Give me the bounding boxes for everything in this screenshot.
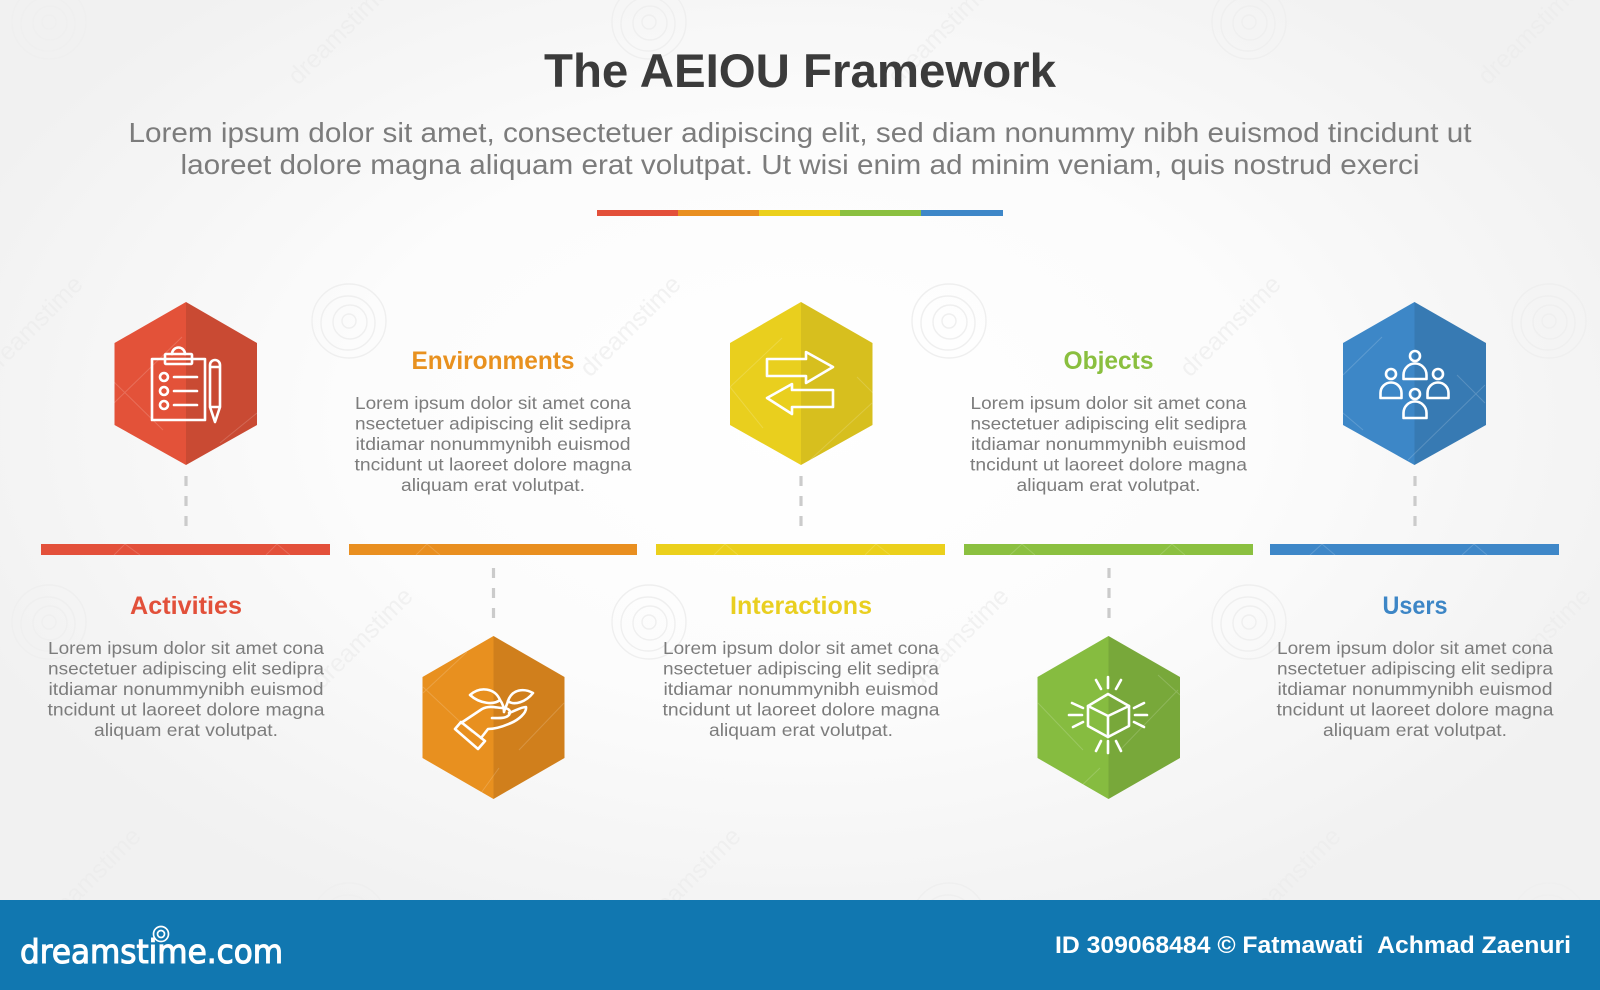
icon: hand holding plant bbox=[455, 689, 533, 749]
connector bbox=[799, 476, 803, 527]
icon: clipboard and pencil bbox=[152, 348, 220, 422]
panel: environments bbox=[349, 347, 637, 799]
users text: aliquam erat volutpat. bbox=[1323, 720, 1507, 740]
activities heading: Activities bbox=[130, 592, 242, 620]
environments text: tncidunt ut laoreet dolore magna bbox=[354, 454, 632, 474]
interactions bar bbox=[656, 544, 945, 555]
interactions heading: Interactions bbox=[730, 592, 872, 620]
interactions text: Lorem ipsum dolor sit amet cona bbox=[663, 638, 939, 658]
users bar bbox=[1270, 544, 1559, 555]
interactions hexagon bbox=[730, 302, 873, 465]
image id and credit: ID 309068484 © Fatmawati Achmad Zaenuri bbox=[1055, 932, 1571, 959]
interactions text bbox=[662, 638, 940, 740]
users text: tncidunt ut laoreet dolore magna bbox=[1276, 700, 1554, 720]
panel: users bbox=[1270, 302, 1559, 740]
users heading: Users bbox=[1382, 592, 1448, 620]
objects text: aliquam erat volutpat. bbox=[1016, 475, 1200, 495]
title: The AEIOU Framework bbox=[544, 44, 1057, 97]
panel: interactions bbox=[656, 302, 945, 740]
connector bbox=[492, 568, 495, 619]
dreamstime logo: dreamstime.com bbox=[20, 932, 283, 971]
environments heading: Environments bbox=[412, 347, 574, 375]
interactions text: tncidunt ut laoreet dolore magna bbox=[662, 700, 940, 720]
activities text: aliquam erat volutpat. bbox=[94, 720, 278, 740]
watermark pattern: dreamstime bbox=[306, 582, 419, 694]
subtitle text: Lorem ipsum dolor sit amet, consectetuer adipiscing elit, sed diam nonummy nibh euismod tincidunt ut bbox=[128, 117, 1472, 148]
objects bar bbox=[964, 544, 1253, 555]
activities text: nsectetuer adipiscing elit sedipra bbox=[48, 658, 324, 678]
multicolour title rule bbox=[597, 210, 1003, 216]
objects text: itdiamar nonummynibh euismod bbox=[971, 434, 1246, 454]
icon: group of people bbox=[1380, 351, 1448, 418]
objects text: nsectetuer adipiscing elit sedipra bbox=[970, 414, 1247, 434]
objects text bbox=[970, 393, 1247, 495]
environments text bbox=[354, 393, 632, 495]
activities text: Lorem ipsum dolor sit amet cona bbox=[48, 638, 324, 658]
watermark pattern: dreamstime bbox=[574, 270, 687, 382]
subtitle text: laoreet dolore magna aliquam erat volutpat. Ut wisi enim ad minim veniam, quis nostrud exerci bbox=[180, 149, 1420, 180]
interactions text: itdiamar nonummynibh euismod bbox=[664, 679, 938, 699]
connector bbox=[1107, 568, 1111, 619]
watermark pattern: dreamstime bbox=[1234, 822, 1347, 934]
connector bbox=[1413, 476, 1417, 527]
icon: glowing cube bbox=[1069, 677, 1147, 753]
watermark marks on bars bbox=[114, 544, 1487, 555]
environments text: Lorem ipsum dolor sit amet cona bbox=[355, 393, 631, 413]
activities text: tncidunt ut laoreet dolore magna bbox=[48, 700, 325, 720]
icon: exchange arrows bbox=[767, 352, 833, 414]
connector bbox=[184, 476, 188, 527]
objects text: tncidunt ut laoreet dolore magna bbox=[970, 454, 1247, 474]
environments text: aliquam erat volutpat. bbox=[401, 475, 585, 495]
panel: objects bbox=[964, 347, 1253, 799]
environments text: itdiamar nonummynibh euismod bbox=[356, 434, 630, 454]
environments bar bbox=[349, 544, 637, 555]
users hexagon bbox=[1343, 302, 1486, 465]
objects heading: Objects bbox=[1064, 347, 1154, 375]
watermark pattern: dreamstime bbox=[634, 822, 747, 934]
objects hexagon bbox=[1038, 636, 1180, 799]
users text: Lorem ipsum dolor sit amet cona bbox=[1277, 638, 1553, 658]
activities hexagon bbox=[114, 302, 257, 465]
interactions text: aliquam erat volutpat. bbox=[709, 720, 893, 740]
environments text: nsectetuer adipiscing elit sedipra bbox=[355, 414, 631, 434]
environments hexagon bbox=[422, 636, 564, 799]
users text bbox=[1276, 638, 1554, 740]
interactions text: nsectetuer adipiscing elit sedipra bbox=[663, 658, 939, 678]
watermark pattern: dreamstime bbox=[902, 582, 1015, 694]
users text: itdiamar nonummynibh euismod bbox=[1278, 679, 1552, 699]
activities text bbox=[48, 638, 325, 740]
users text: nsectetuer adipiscing elit sedipra bbox=[1277, 658, 1553, 678]
watermark pattern: dreamstime bbox=[34, 822, 147, 934]
objects text: Lorem ipsum dolor sit amet cona bbox=[970, 393, 1247, 413]
panel: activities bbox=[41, 302, 330, 740]
activities text: itdiamar nonummynibh euismod bbox=[48, 679, 324, 699]
watermark pattern: dreamstime bbox=[1484, 582, 1597, 694]
activities bar bbox=[41, 544, 330, 555]
watermark pattern: dreamstime bbox=[1174, 270, 1287, 382]
subtitle text bbox=[128, 117, 1472, 180]
footer banner bbox=[0, 900, 1600, 990]
